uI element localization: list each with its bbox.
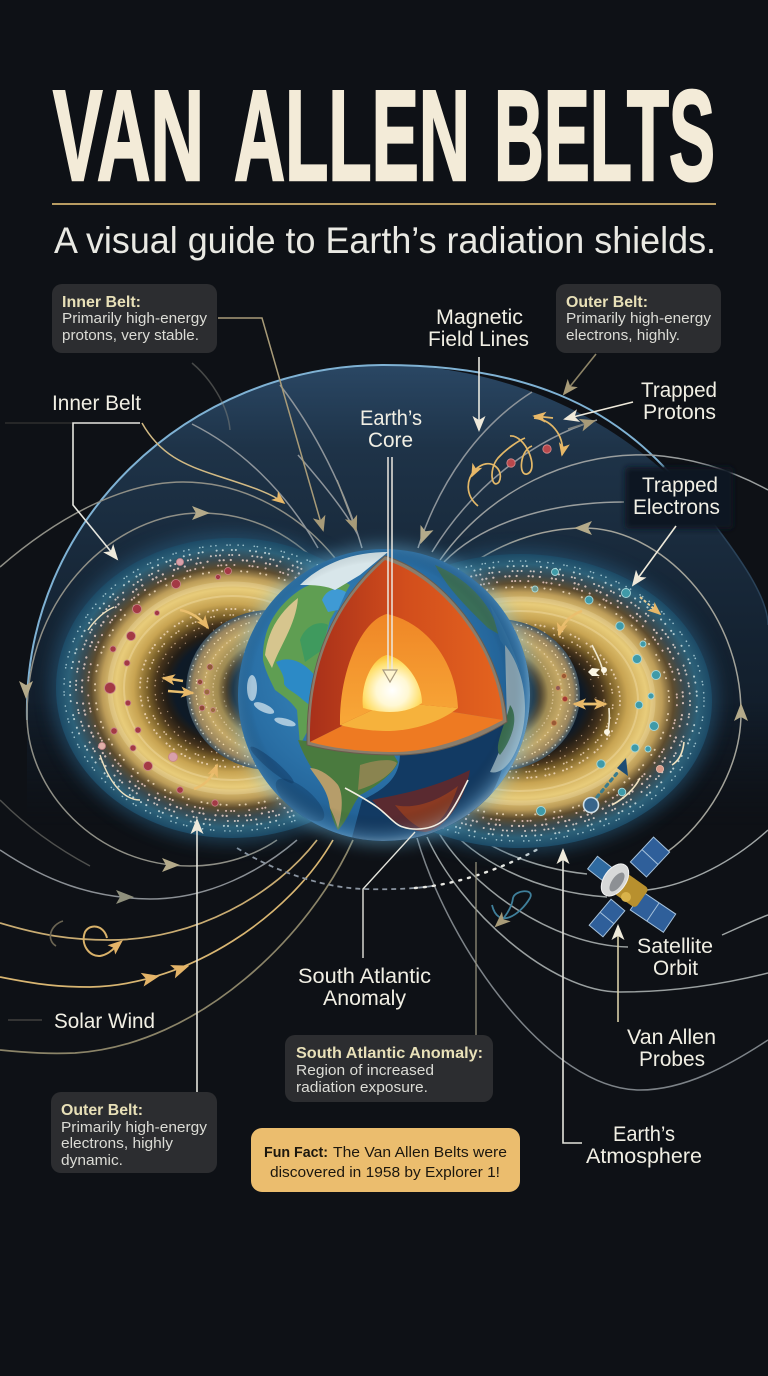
Earth globe: [234, 545, 534, 850]
anomaly boundary curve: [345, 780, 468, 829]
helix: trapped protons: [468, 416, 594, 506]
title: VAN: [53, 64, 204, 208]
label: Trapped Protons: Trapped: [641, 379, 717, 402]
leader: magnetic field lines arrow: [478, 357, 480, 430]
floor: [310, 702, 503, 752]
leader: atmosphere: [563, 850, 582, 1143]
Earth cutaway interior: [307, 556, 507, 755]
outer core layer: [340, 614, 458, 725]
callout: outer belt bottom: [51, 1092, 217, 1173]
Hudson and arctic: [322, 589, 346, 612]
title: ALLEN: [234, 64, 470, 208]
satellite probe in belt with dotted path: [584, 758, 628, 812]
label: Trapped Electrons: Trapped: [642, 474, 718, 497]
South America: [298, 740, 398, 830]
right belt speckles: [336, 561, 704, 841]
leader: inner belt label to belt: [5, 423, 284, 559]
label: Satellite Orbit: Orbit: [653, 957, 698, 980]
callout: inner belt: [52, 284, 217, 353]
left outer belt: [50, 532, 414, 844]
callout: south atlantic anomaly: South Atlantic Anomaly:: [296, 1045, 483, 1062]
clouds: [247, 675, 297, 728]
icon: satellite: [588, 837, 676, 937]
leader: south atlantic anomaly: [363, 832, 415, 958]
field lines: solar wind: [0, 840, 353, 1053]
field line arrowheads: [19, 506, 748, 987]
leader: outer belt callout arrow: [564, 354, 596, 394]
label: Trapped Protons: Protons: [643, 401, 716, 424]
callout: outer belt bottom: dynamic.: [61, 1152, 123, 1169]
inner core: [363, 655, 422, 712]
callout: south atlantic anomaly: [285, 1035, 493, 1102]
label: Inner Belt: Inner Belt: [52, 392, 141, 415]
label: Van Allen Probes: Van Allen: [627, 1026, 716, 1049]
label: Earth's Atmosphere: Earth’s: [613, 1123, 675, 1146]
leader: trapped protons arrow: [565, 402, 633, 419]
label: Van Allen Probes: [627, 1026, 716, 1071]
small white markers in right belt: [588, 667, 610, 735]
orbit dashed path: [237, 848, 540, 889]
callout: outer belt top: Outer Belt:: [566, 294, 648, 311]
leader: anomaly callout: [475, 862, 477, 1035]
label: Satellite Orbit: Satellite: [637, 935, 713, 958]
callout: outer belt bottom: Outer Belt:: [61, 1102, 143, 1119]
subtitle: A visual guide to Earth’s radiation shields.: [54, 220, 716, 261]
callout: fun fact: discovered in 1958 by Explorer 1!: [270, 1164, 500, 1181]
leader: second inner arrow: [337, 480, 356, 530]
callout: fun fact: The Van Allen Belts were: [333, 1144, 507, 1161]
callout: fun fact: Fun Fact:: [264, 1144, 328, 1161]
label: Magnetic Field Lines: Magnetic: [436, 306, 523, 329]
callout: outer belt bottom: Primarily high-energy: [61, 1119, 208, 1136]
left belt motion arrows: [88, 607, 217, 800]
label: Trapped Electrons: [633, 474, 720, 519]
callout: south atlantic anomaly: Region of increased: [296, 1062, 434, 1079]
label: Earth's Core: Core: [368, 429, 413, 452]
trapped electrons label backing: [625, 467, 733, 529]
callout: inner belt: protons, very stable.: [62, 327, 199, 344]
left inner belt: [186, 610, 354, 770]
leader: earth's core arrow: [383, 457, 397, 682]
left belt protons: [98, 558, 232, 806]
label: South Atlantic Anomaly: South Atlantic: [298, 965, 431, 988]
magnetic field lines: [0, 363, 768, 1090]
callout: outer belt top: [556, 284, 721, 353]
label: Solar Wind: Solar Wind: [54, 1010, 155, 1033]
right outer belt: [322, 549, 718, 853]
leader: trapped electrons arrow: [633, 526, 676, 585]
mantle wall: [310, 560, 503, 742]
dark south ocean: [352, 724, 504, 841]
label: Earth's Core: Earth’s: [360, 407, 422, 430]
right inner belt: [414, 619, 580, 771]
label: Trapped Protons: [641, 379, 717, 424]
label: Earth's Atmosphere: Atmosphere: [586, 1145, 702, 1168]
magnetosphere dome: [26, 364, 768, 760]
callout: inner belt: Primarily high-energy: [62, 310, 208, 327]
callout: outer belt bottom: electrons, highly: [61, 1135, 174, 1152]
right belt motion arrows: [559, 597, 684, 805]
label: South Atlantic Anomaly: [298, 965, 431, 1010]
title: [53, 64, 715, 208]
label: Satellite Orbit: [637, 935, 713, 980]
leader: van allen probes: [617, 926, 619, 1022]
right side land: [435, 565, 500, 635]
small teal helix: [492, 891, 531, 926]
label: Magnetic Field Lines: Field Lines: [428, 328, 529, 351]
label: Trapped Electrons: Electrons: [633, 496, 720, 519]
callout: south atlantic anomaly: radiation exposure.: [296, 1079, 428, 1096]
label: South Atlantic Anomaly: Anomaly: [323, 987, 407, 1010]
leader: outer belt lower callout: [196, 820, 198, 1092]
callout: outer belt top: electrons, highly.: [566, 327, 680, 344]
left belt speckles: [64, 545, 400, 831]
right belt electrons: [532, 568, 664, 816]
callout: outer belt top: Primarily high-energy: [566, 310, 712, 327]
label: Magnetic Field Lines: [428, 306, 529, 351]
callout: fun fact: [251, 1128, 520, 1192]
callout: inner belt: Inner Belt:: [62, 294, 141, 311]
label: Earth's Core: [360, 407, 422, 452]
crust edge: [307, 556, 507, 755]
North America: [263, 580, 350, 745]
anomaly region: [372, 770, 470, 832]
leader: inner belt callout: [218, 318, 323, 530]
label: Earth's Atmosphere: [586, 1123, 702, 1168]
label: Van Allen Probes: Probes: [639, 1048, 705, 1071]
